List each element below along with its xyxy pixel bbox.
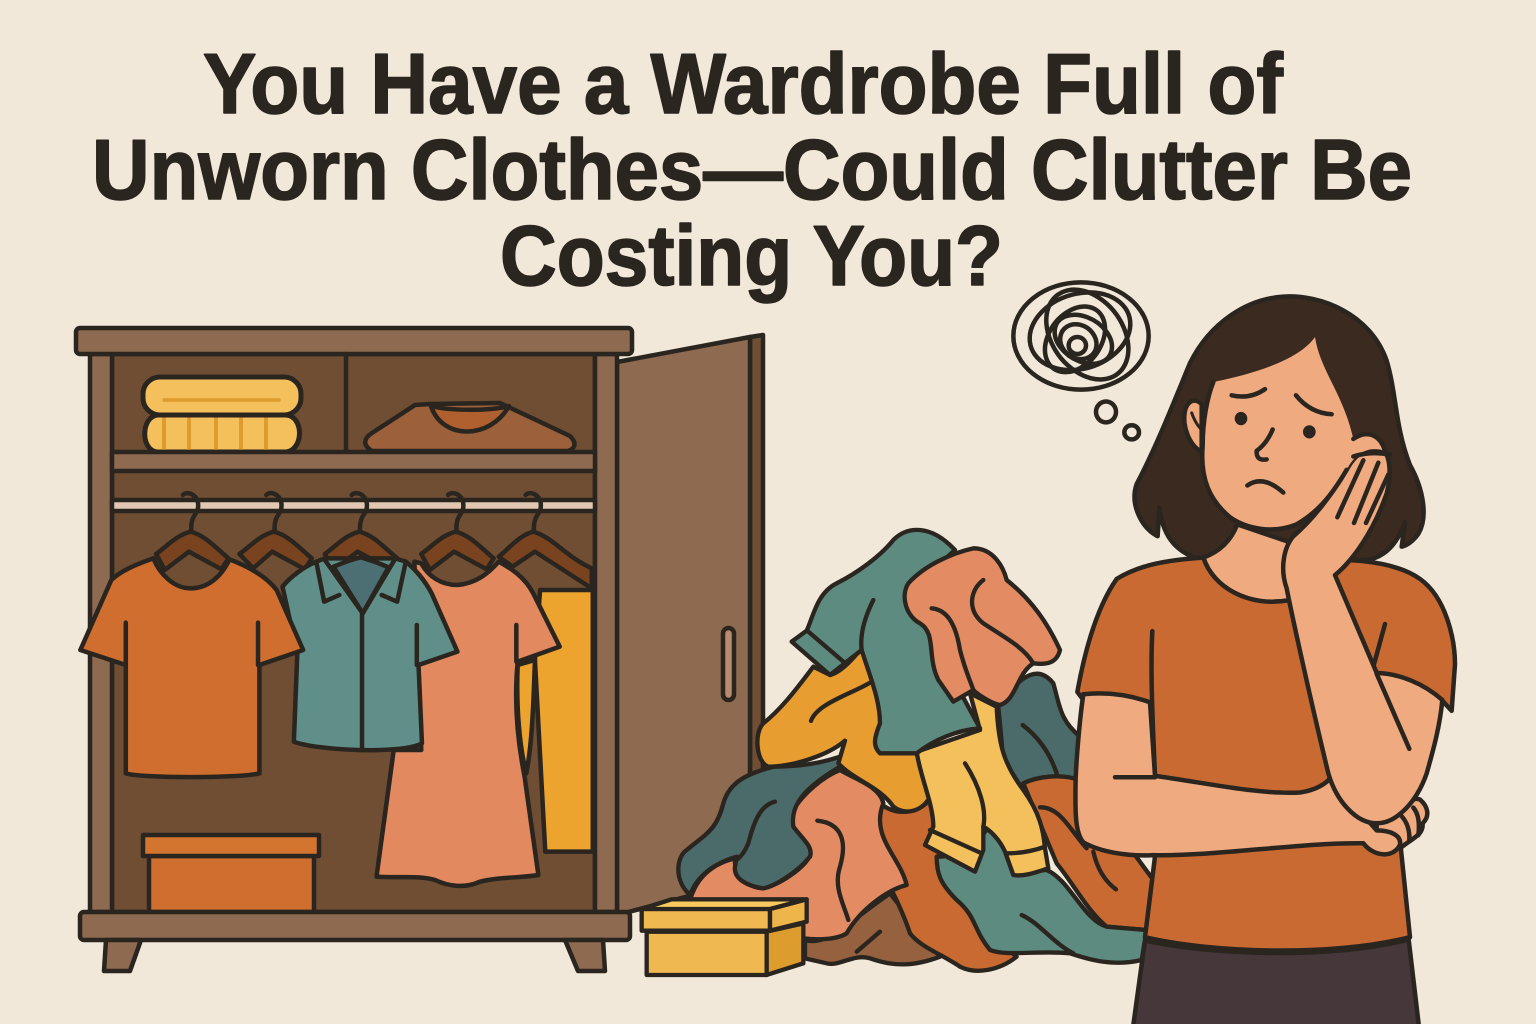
orange back piece — [1023, 776, 1153, 930]
orange t-shirt — [80, 558, 303, 777]
top board — [76, 328, 632, 354]
hair — [1135, 296, 1424, 560]
face — [1184, 337, 1385, 530]
shirt — [1077, 558, 1455, 951]
title: Unworn Clothes—Could Clutter Be — [92, 123, 1412, 218]
open door — [617, 335, 763, 915]
worried woman — [1075, 296, 1455, 1024]
teal top piece — [792, 530, 980, 753]
wardrobe interior — [112, 354, 595, 912]
teal shirt — [282, 557, 457, 750]
yellow box on floor — [642, 899, 807, 975]
tucked fingers — [1377, 799, 1427, 847]
yellow piece — [917, 693, 1048, 875]
thought bubbles — [1096, 401, 1139, 439]
skirt — [1133, 940, 1419, 1024]
nose — [1257, 429, 1273, 460]
dark orange centre piece — [873, 800, 1017, 971]
neck — [1203, 524, 1300, 602]
title — [92, 37, 1412, 304]
hanging clothes — [80, 493, 593, 886]
side posts — [90, 354, 617, 912]
hanging rail — [112, 500, 595, 511]
shelf board — [112, 452, 595, 471]
shelf divider — [344, 354, 348, 452]
sad mouth — [1247, 481, 1283, 493]
title: You Have a Wardrobe Full of — [203, 37, 1284, 132]
eyebrows — [1232, 389, 1332, 414]
ear — [1184, 401, 1202, 452]
fingers — [1337, 453, 1390, 523]
title: Costing You? — [500, 209, 1003, 304]
bottom board — [80, 912, 630, 940]
teal bottom piece — [937, 827, 1147, 963]
dark teal left piece — [678, 757, 840, 895]
hangers — [156, 493, 592, 588]
mustard garment behind — [517, 590, 593, 852]
folded yellow clothes — [143, 377, 301, 452]
storage box in wardrobe — [143, 835, 319, 912]
brown piece — [805, 893, 940, 964]
dark teal back piece — [998, 674, 1080, 790]
salmon top piece — [905, 548, 1060, 705]
arm details — [1115, 674, 1409, 777]
wardrobe feet — [104, 940, 605, 971]
wardrobe — [76, 328, 763, 971]
eyes — [1235, 412, 1316, 438]
salmon left piece — [690, 770, 907, 939]
thought bubble scribble — [1013, 272, 1149, 439]
left arm — [1075, 693, 1400, 855]
right arm and hand — [1283, 449, 1442, 823]
pile of clothes — [678, 530, 1153, 971]
mustard piece — [757, 650, 930, 811]
salmon dress — [377, 562, 560, 886]
folded brown shirt — [365, 403, 574, 451]
